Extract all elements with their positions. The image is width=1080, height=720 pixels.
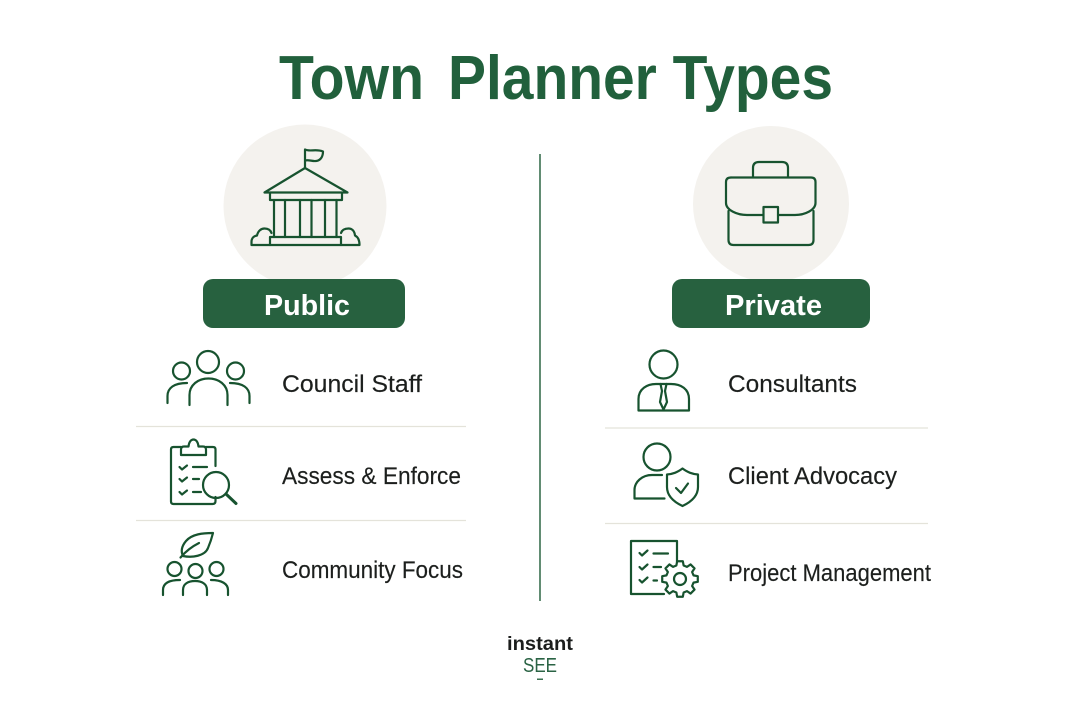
- label: Council Staff: [282, 371, 422, 398]
- icon: clipboard with magnifier: [171, 440, 236, 504]
- title: Town: [279, 44, 424, 113]
- badge: Public: Public: [264, 290, 350, 322]
- label: Project Management: [728, 560, 931, 587]
- badge: Public: [203, 279, 405, 328]
- row: Assess & Enforce: [171, 440, 461, 504]
- title: Planner Types: [448, 44, 833, 113]
- row: Council Staff: [168, 351, 422, 405]
- row: Community Focus: [163, 533, 463, 595]
- icon: group of people: [168, 351, 250, 405]
- label: Community Focus: [282, 557, 463, 584]
- icon: government building in circle: [224, 124, 386, 288]
- panel: public: [136, 124, 466, 595]
- logo: instantSEE: instant: [507, 634, 574, 655]
- label: Assess & Enforce: [282, 463, 461, 490]
- logo: instantSEE: SEE: [523, 655, 557, 677]
- logo: instantSEE: [507, 634, 574, 680]
- badge: Private: Private: [725, 290, 822, 322]
- icon: person with shield: [634, 444, 698, 506]
- badge: Private: [672, 279, 870, 328]
- icon: people with leaf: [163, 533, 228, 595]
- icon: briefcase in circle: [693, 126, 849, 282]
- label: Consultants: [728, 371, 857, 398]
- row: Project Management: [631, 541, 931, 597]
- row: Client Advocacy: [634, 444, 897, 506]
- row: Consultants: [638, 350, 857, 410]
- panel: private: [605, 126, 931, 597]
- icon: checklist with gear: [631, 541, 698, 597]
- center divider: [539, 154, 541, 601]
- icon: person with tie: [638, 350, 689, 410]
- label: Client Advocacy: [728, 463, 897, 490]
